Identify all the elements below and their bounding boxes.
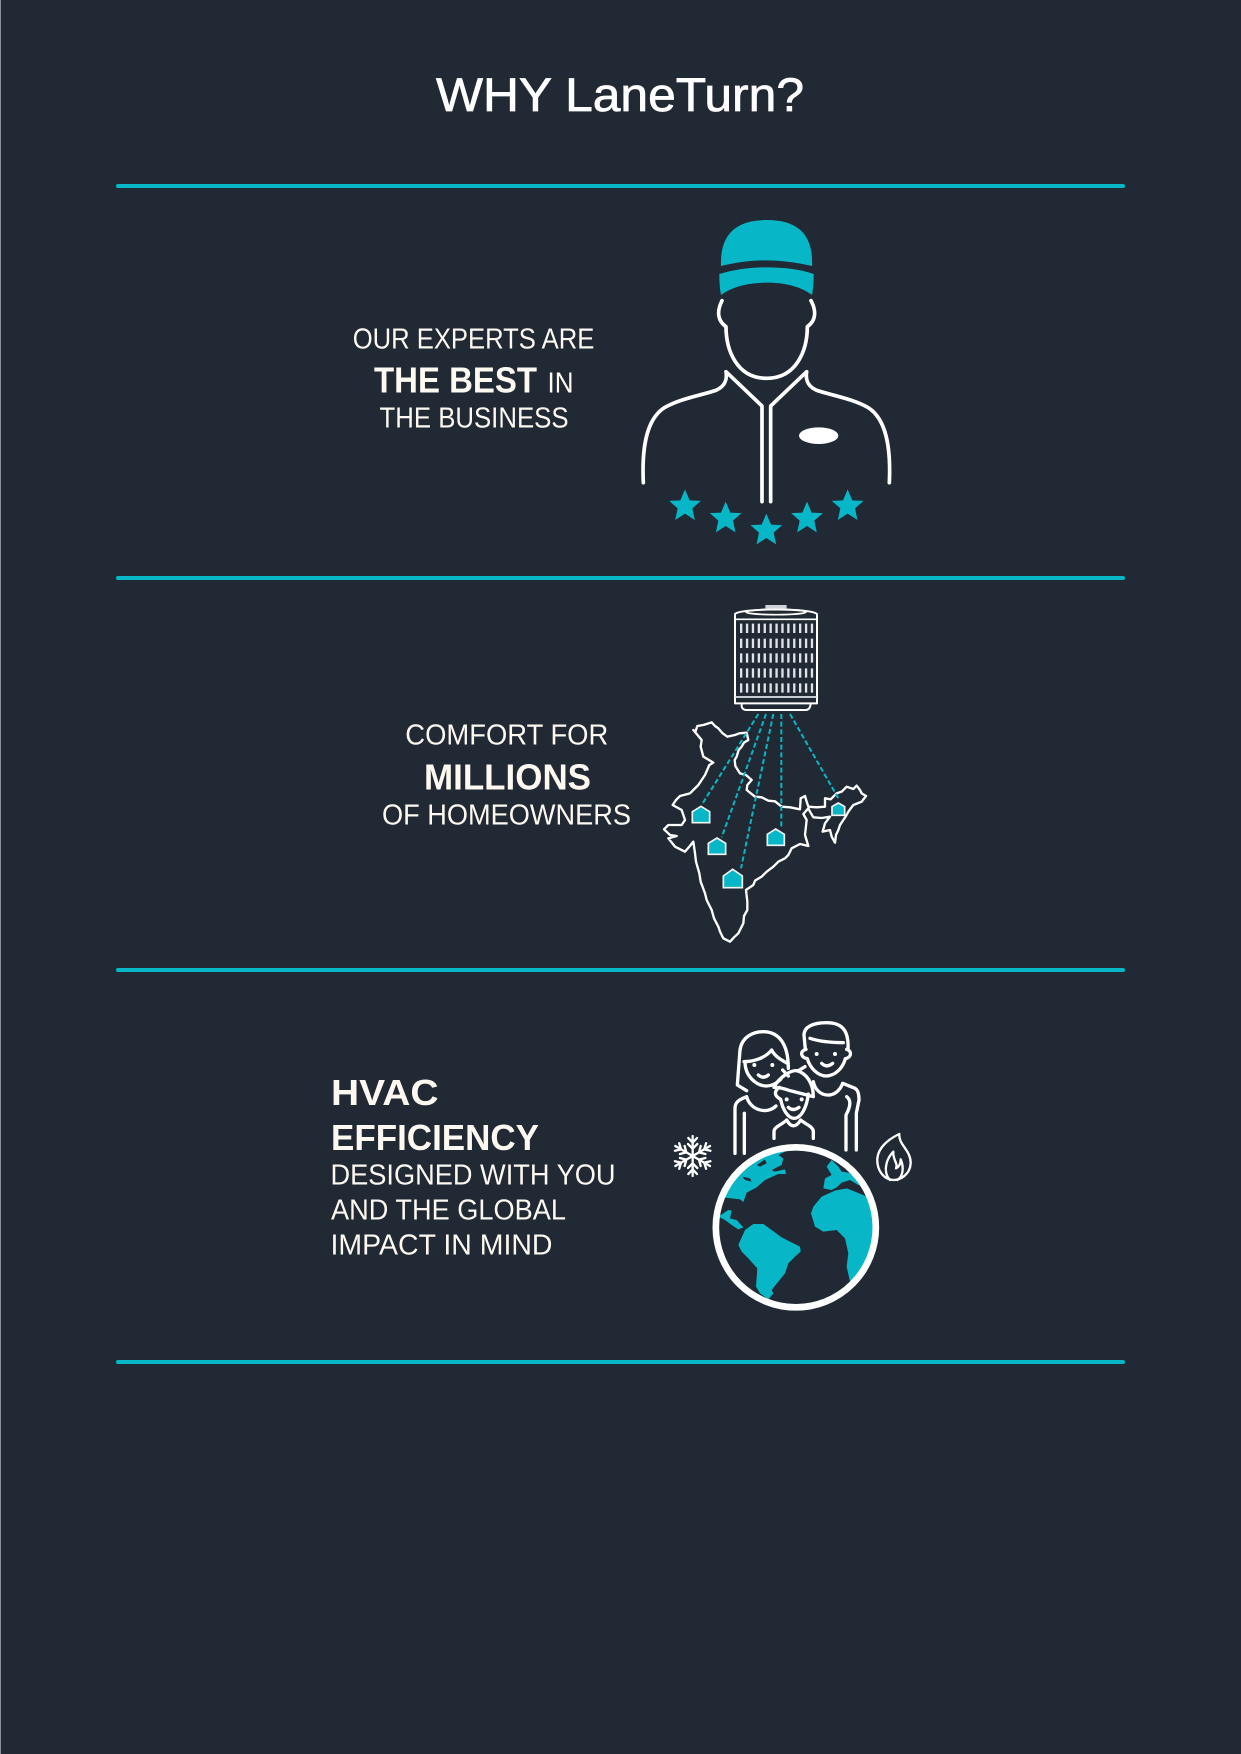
icon: map of India outline [664,722,866,942]
text: our experts are the best: THE BUSINESS [380,403,568,435]
text: comfort for millions [382,720,631,831]
panel: millions of homeowners [382,606,866,942]
text: HVAC efficiency description: HVAC [331,1072,438,1113]
icon: globe [716,1147,883,1307]
icon: family, globe, snowflake and flame [673,1023,911,1307]
panel: HVAC efficiency [330,1023,911,1307]
icon: technician with five stars [643,220,890,544]
icon: cap [719,220,814,295]
icon: dashed connector lines [703,714,838,868]
panel: experts [353,220,890,544]
text: HVAC efficiency description: DESIGNED WITH YOU [330,1159,616,1191]
text: our experts are the best: OUR EXPERTS ARE [353,323,594,355]
icon: head and shoulders outline [643,301,890,502]
icon: family [735,1023,859,1153]
icon: snowflake [673,1136,712,1176]
text: comfort for millions: MILLIONS [424,756,591,797]
text: our experts are the best: THE BEST [374,360,537,401]
text: HVAC efficiency description: AND THE GLOBAL [331,1194,566,1226]
text: HVAC efficiency description: EFFICIENCY [331,1117,539,1158]
text: our experts are the best [353,323,594,435]
icon: houses [692,803,845,888]
text: HVAC efficiency description [330,1072,616,1261]
text: our experts are the best: IN [548,368,574,400]
text: HVAC efficiency description: IMPACT IN MIND [330,1229,552,1261]
text: comfort for millions: OF HOMEOWNERS [382,799,631,831]
icon: AC unit [735,606,817,710]
icon: air conditioner over map of India [664,606,866,942]
icon: flame [877,1134,911,1180]
title: WHY LaneTurn? [436,68,804,121]
text: comfort for millions: COMFORT FOR [405,720,608,752]
icon: name badge [799,427,838,444]
icon: stars [669,489,864,544]
